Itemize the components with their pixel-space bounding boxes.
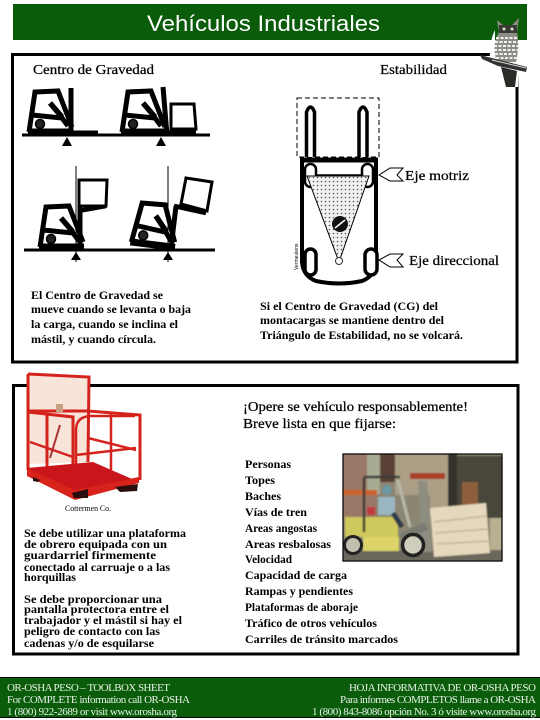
text block: protective screen bbox=[24, 592, 183, 650]
checklist: Areas angostas bbox=[245, 521, 317, 535]
text block: protective screen: peligro de contacto con las bbox=[24, 624, 160, 638]
text block: centre of gravity: mueve cuando se levanta o baja bbox=[31, 302, 191, 316]
forklift diagram: raised load bbox=[24, 166, 215, 262]
stability triangle diagram: Vermeulens bbox=[294, 243, 300, 270]
text block: stability: Si el Centro de Gravedad (CG) del bbox=[260, 299, 439, 313]
footer bar bbox=[0, 677, 540, 718]
checklist: Carriles de tránsito marcados bbox=[245, 632, 398, 646]
text block: stability bbox=[260, 299, 463, 342]
forklift body bbox=[345, 517, 398, 537]
label: Eje motriz bbox=[379, 168, 469, 184]
footer: Spanish contact: HOJA INFORMATIVA DE OR-OSHA PESO bbox=[349, 682, 536, 694]
footer: English contact: OR-OSHA PESO – TOOLBOX SHEET bbox=[7, 682, 170, 694]
stability triangle diagram bbox=[294, 98, 379, 284]
text block: protective screen: pantalla protectora entre el bbox=[24, 602, 170, 616]
title banner bbox=[13, 4, 527, 40]
label: Eje motriz: Eje motriz bbox=[405, 169, 469, 184]
checklist: Rampas y pendientes bbox=[245, 584, 353, 598]
heading: operate responsibly bbox=[243, 400, 468, 432]
owl mascot bbox=[480, 18, 527, 87]
checklist: Personas bbox=[245, 457, 291, 471]
forklift diagram: low load bbox=[121, 87, 196, 146]
text block: platform requirement: conectado al carruaje o a las bbox=[24, 560, 170, 574]
text block: platform requirement: de obrero equipada con un bbox=[24, 537, 167, 551]
panel: safe operation bbox=[14, 386, 518, 654]
text block: protective screen: Se debe proporcionar una bbox=[24, 592, 162, 606]
footer: Spanish contact: 1 (800) 843-8086 opción No. 3 ó visite www.orosha.org bbox=[312, 706, 536, 718]
warehouse background bbox=[343, 454, 377, 524]
heading: Estabilidad: Estabilidad bbox=[380, 63, 447, 78]
text block: centre of gravity: El Centro de Gravedad se bbox=[31, 288, 164, 302]
forklift diagram: no load bbox=[22, 88, 210, 146]
text block: stability: montacargas se mantiene dentro del bbox=[260, 313, 445, 327]
forklift diagram: tilted mast bbox=[130, 166, 212, 262]
text block: centre of gravity: la carga, cuando se inclina el bbox=[31, 317, 179, 331]
checklist: Tráfico de otros vehículos bbox=[245, 616, 377, 630]
text block: stability: Triángulo de Estabilidad, no se volcará. bbox=[260, 328, 463, 342]
image: red work platform bbox=[27, 374, 140, 500]
footer: English contact: For COMPLETE information call OR-OSHA bbox=[7, 694, 190, 706]
title banner: Vehículos Industriales bbox=[147, 11, 380, 36]
caption: Cottermen Co.: Cottermen Co. bbox=[65, 504, 111, 513]
footer: English contact: 1 (800) 922-2689 or visit www.orosha.org bbox=[7, 706, 178, 718]
text block: protective screen: trabajador y el mástil si hay el bbox=[24, 613, 183, 627]
checklist: Topes bbox=[245, 473, 275, 487]
text block: protective screen: cadenas y/o de esquilarse bbox=[24, 636, 155, 650]
footer: Spanish contact bbox=[312, 682, 536, 718]
checklist: Capacidad de carga bbox=[245, 568, 347, 582]
checklist: Vías de tren bbox=[245, 505, 307, 519]
heading: operate responsibly: Breve lista en que fijarse: bbox=[243, 417, 396, 432]
text block: platform requirement: Se debe utilizar una plataforma bbox=[24, 526, 186, 540]
driver bbox=[378, 497, 395, 515]
photo: forklift carrying sacks in warehouse bbox=[343, 454, 502, 561]
label: Eje direccional: Eje direccional bbox=[409, 254, 499, 269]
footer: English contact bbox=[7, 682, 190, 718]
text block: platform requirement: guardarriel firmemente bbox=[24, 548, 157, 562]
heading: Centro de Gravedad: Centro de Gravedad bbox=[33, 63, 154, 78]
text block: platform requirement: horquillas bbox=[24, 570, 76, 584]
text block: centre of gravity: mástil, y cuando círcula. bbox=[31, 332, 156, 346]
text block: platform requirement bbox=[24, 526, 186, 584]
heading: operate responsibly: ¡Opere se vehículo responsablemente! bbox=[243, 400, 468, 415]
checklist: Baches bbox=[245, 489, 281, 503]
footer: Spanish contact: Para informes COMPLETOS llame a OR-OSHA bbox=[340, 694, 536, 706]
checklist bbox=[245, 457, 398, 646]
text block: centre of gravity bbox=[31, 288, 191, 346]
checklist: Plataformas de aboraje bbox=[245, 600, 359, 614]
sacks on pallet bbox=[430, 503, 490, 557]
checklist: Areas resbalosas bbox=[245, 537, 331, 551]
checklist: Velocidad bbox=[245, 552, 292, 566]
overhead guard and mast bbox=[364, 477, 400, 532]
